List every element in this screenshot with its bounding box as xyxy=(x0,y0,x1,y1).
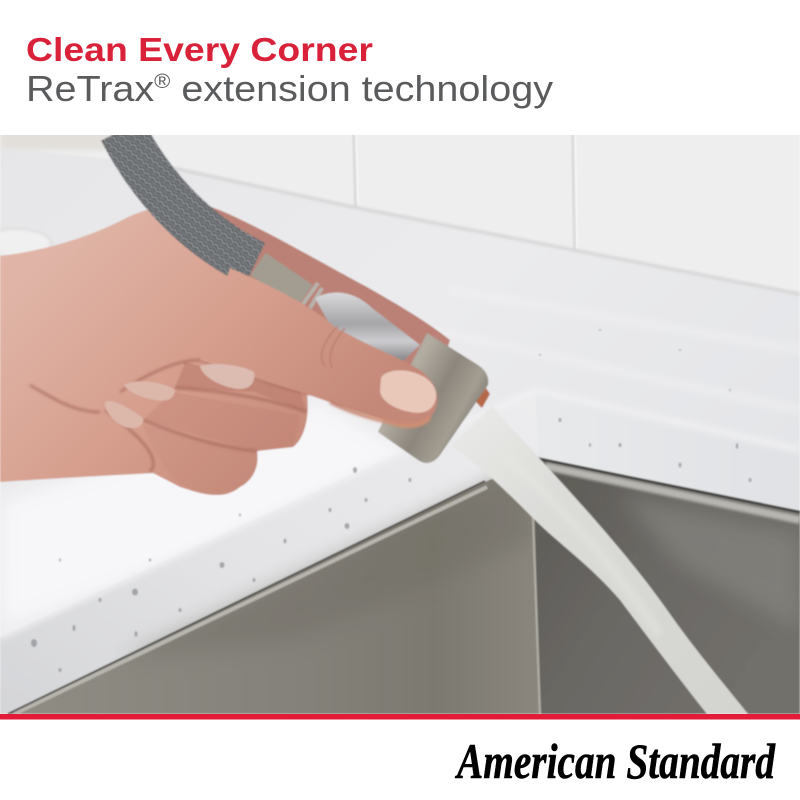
hose ferrule xyxy=(258,264,305,296)
counter corner crease xyxy=(2,426,798,639)
index nail xyxy=(200,364,254,389)
sink rim left xyxy=(8,481,487,714)
ring finger nail xyxy=(105,401,143,428)
glass soap dish xyxy=(0,229,42,256)
finger behind sprayer xyxy=(205,205,450,372)
hand and palm xyxy=(0,209,308,496)
counter front edge left xyxy=(0,390,538,714)
middle finger nail xyxy=(124,381,175,401)
counter top soft highlight xyxy=(3,408,394,618)
thumb xyxy=(200,268,437,426)
chrome swivel xyxy=(315,293,420,362)
sink right sheen xyxy=(630,497,800,619)
sprayer head xyxy=(378,333,490,463)
red divider bar xyxy=(0,714,800,720)
photo: hand using pull-out sprayer over a sink xyxy=(0,130,800,714)
water stream xyxy=(452,406,748,714)
sink left shadow under rim xyxy=(131,473,528,652)
sink corner seam xyxy=(533,515,540,714)
counter front edge right xyxy=(535,390,800,512)
sink wall right xyxy=(533,458,800,714)
sink wall left xyxy=(10,460,540,714)
counter top surface xyxy=(0,319,800,636)
heading: Clean Every Corner: Clean Every Corner xyxy=(26,31,373,68)
ferrule collar rings xyxy=(303,283,322,308)
finger shading xyxy=(146,362,305,428)
thumb underside glow xyxy=(330,402,430,426)
braided hose xyxy=(122,130,255,264)
sink rim right xyxy=(536,458,800,520)
thumb nail xyxy=(380,370,436,413)
subheading: ReTrax extension technology: extension technology xyxy=(170,68,553,109)
thumb knuckle creases xyxy=(322,326,345,368)
wall tiles xyxy=(0,135,800,292)
counter streaks right xyxy=(430,290,800,410)
subheading: ReTrax extension technology: ReTrax xyxy=(26,68,143,109)
wall and counter joint xyxy=(150,163,800,294)
finger separation lines xyxy=(30,360,310,472)
counter speckles xyxy=(31,329,752,672)
subheading: ReTrax extension technology: ® xyxy=(154,71,171,93)
